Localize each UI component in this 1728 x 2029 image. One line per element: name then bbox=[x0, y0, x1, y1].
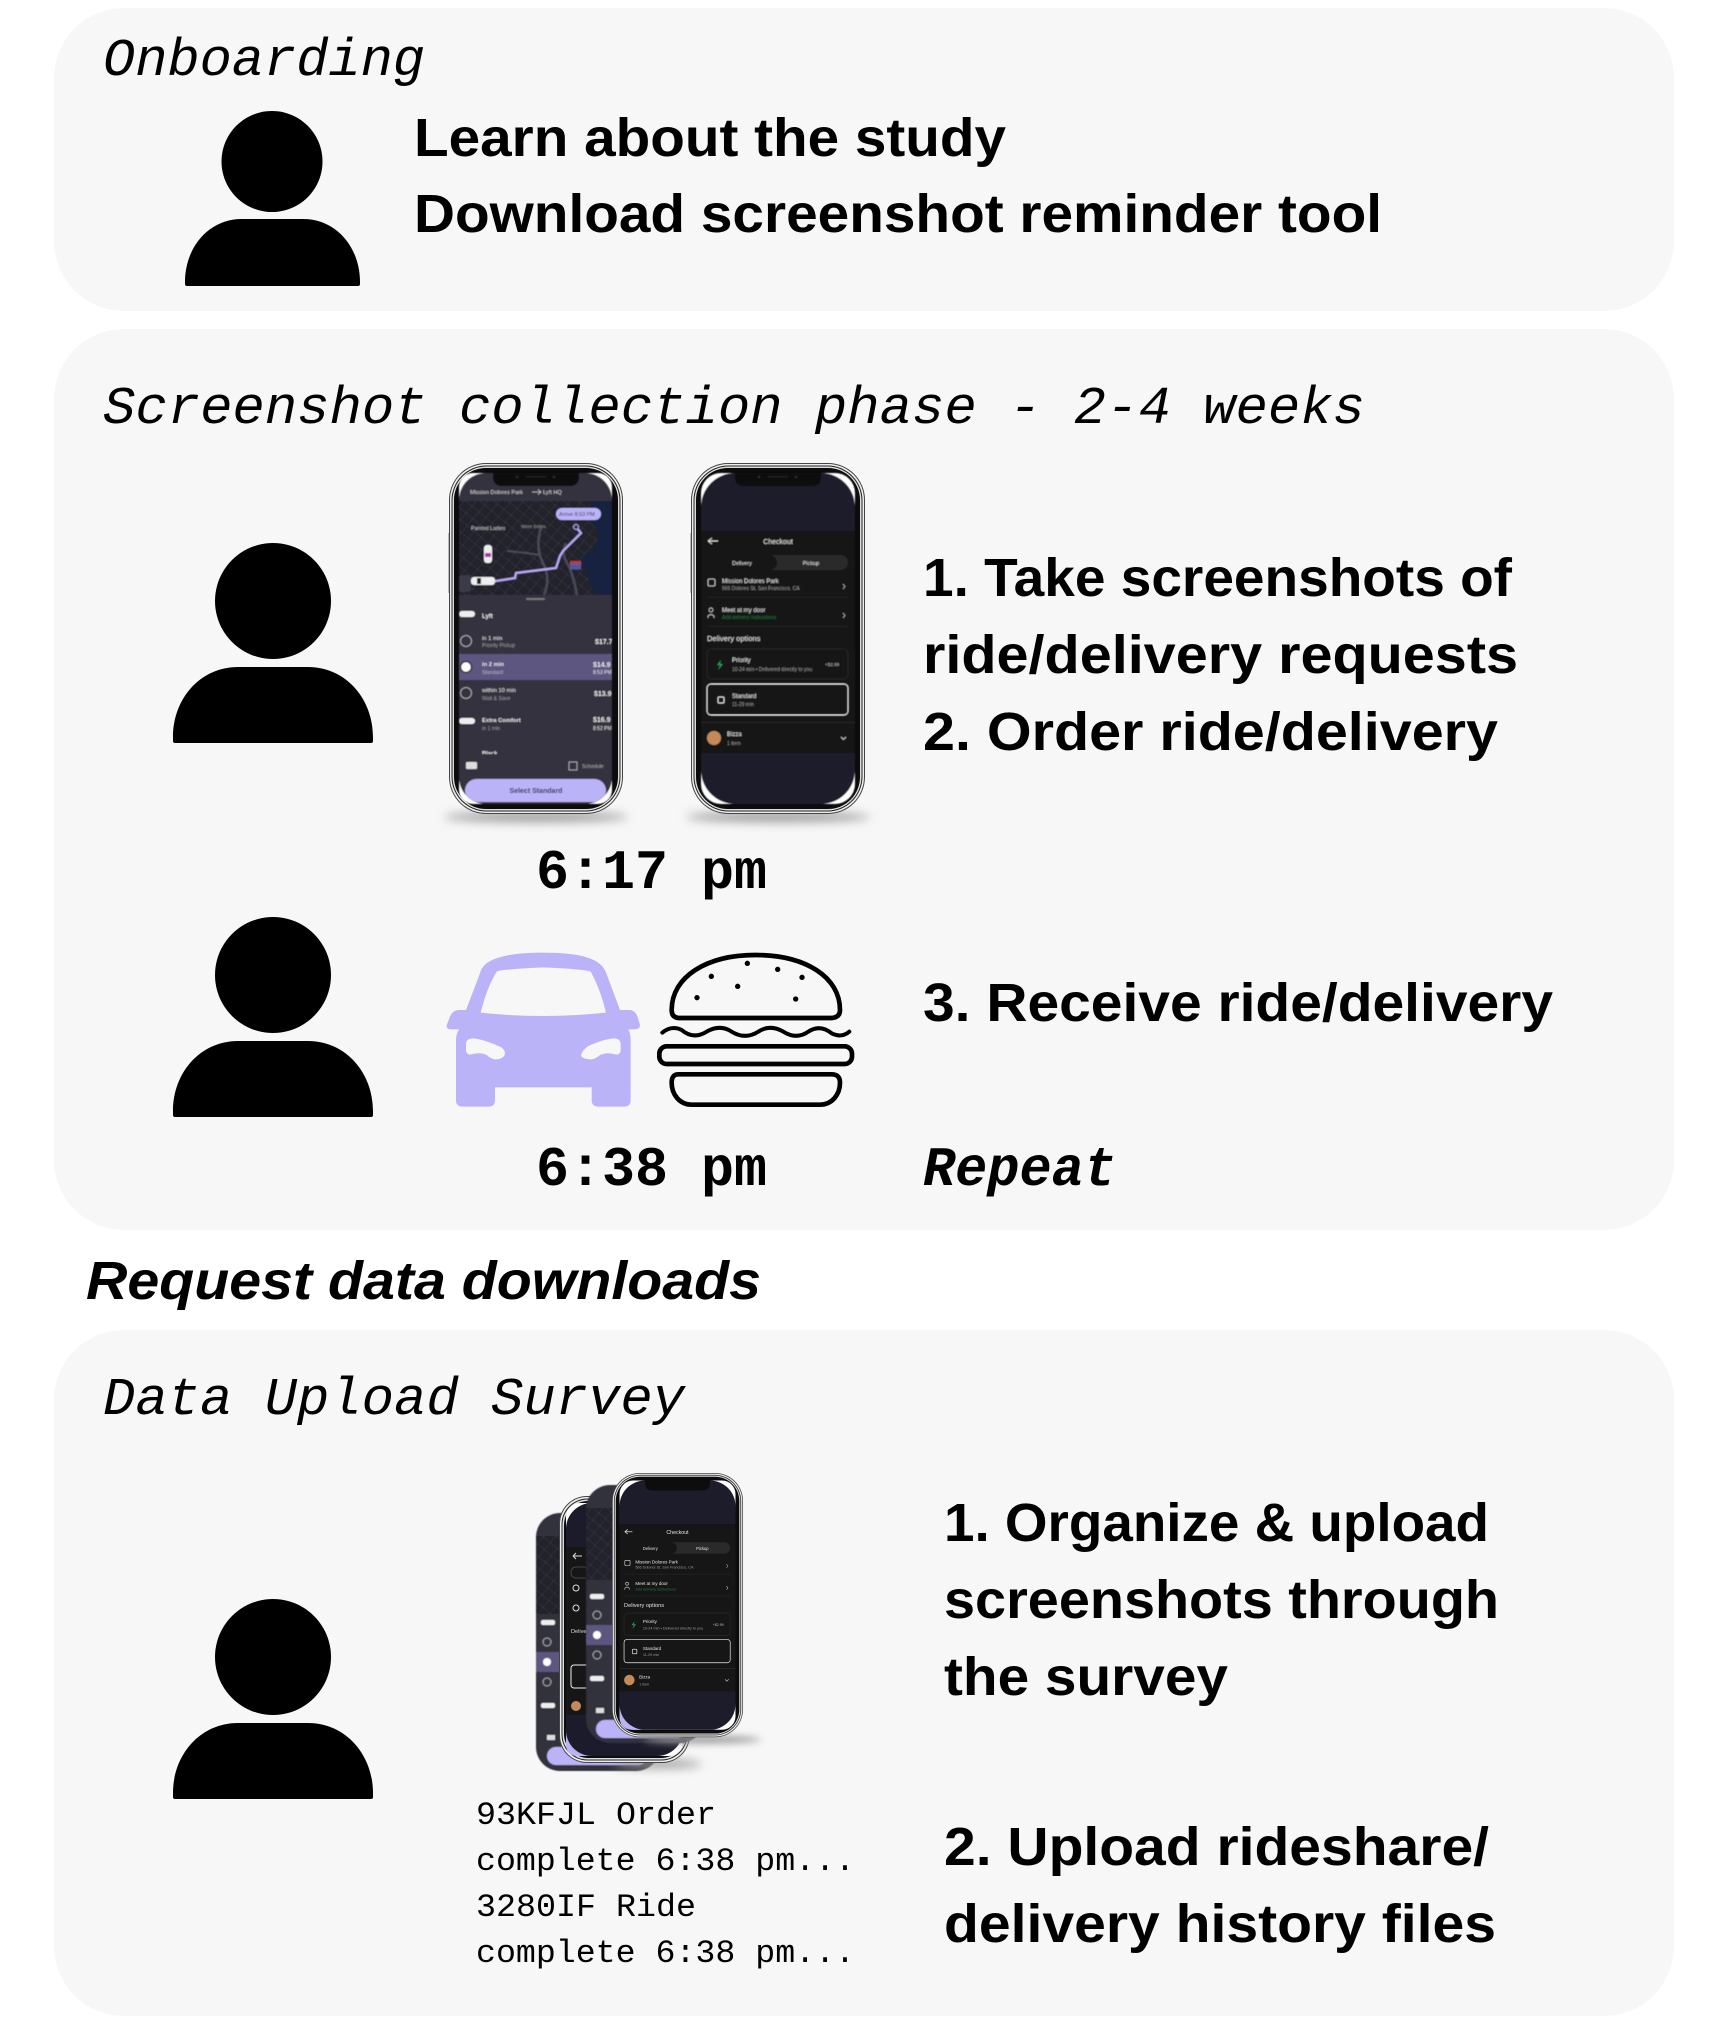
phone: Lyft ride request screenshot bbox=[444, 463, 628, 822]
phone: delivery checkout screenshot: 11-29 min bbox=[732, 702, 754, 708]
text: upload step 2 bbox=[944, 1817, 1496, 1954]
phone: delivery checkout screenshot: Checkout bbox=[763, 539, 793, 546]
phone: delivery checkout screenshot: Mission Dolores Park bbox=[722, 579, 780, 585]
phone: Lyft ride request screenshot: Lyft bbox=[482, 614, 493, 620]
text: upload step 1: the survey bbox=[944, 1647, 1228, 1707]
text: request steps bbox=[923, 548, 1518, 762]
phone: delivery checkout screenshot: Delivery options bbox=[707, 634, 761, 643]
phone: delivery checkout screenshot: Standard bbox=[732, 694, 756, 700]
phone: delivery checkout screenshot: Meet at my door bbox=[722, 608, 765, 614]
front checkout phone: Checkout bbox=[666, 1530, 689, 1536]
text: upload step 2: delivery history files bbox=[944, 1894, 1496, 1954]
front checkout phone bbox=[612, 1473, 761, 1743]
icon: person bbox=[173, 917, 373, 1117]
phone: delivery checkout screenshot: Add delivery instructions bbox=[722, 615, 777, 621]
heading: data upload survey: Data Upload Survey bbox=[103, 1370, 686, 1430]
image: stack of phone screenshots bbox=[536, 1473, 761, 1771]
phone: delivery checkout screenshot: Pickup bbox=[803, 561, 819, 567]
phone: Lyft ride request screenshot: $16.9 bbox=[593, 717, 611, 724]
front checkout phone: Bizza bbox=[639, 1675, 651, 1680]
timestamp: receipt time: 6:38 pm bbox=[536, 1138, 767, 1202]
text: file listing: 3280IF Ride bbox=[476, 1889, 696, 1926]
phone: delivery checkout screenshot: Delivery bbox=[732, 561, 752, 567]
phone: Lyft ride request screenshot: in 2 min bbox=[482, 662, 504, 668]
text: onboarding steps: Learn about the study bbox=[414, 108, 1006, 168]
middle Lyft screenshot bbox=[586, 1485, 704, 1743]
text: onboarding steps: Download screenshot reminder tool bbox=[414, 184, 1382, 244]
front checkout phone: Priority bbox=[643, 1619, 658, 1624]
front checkout phone: Add delivery instructions bbox=[635, 1587, 676, 1591]
phone: Lyft ride request screenshot: Arrive 8:53 PM bbox=[559, 512, 595, 518]
phone: Lyft ride request screenshot: $13.9 bbox=[594, 691, 612, 698]
phone: Lyft ride request screenshot: Standard bbox=[482, 670, 503, 676]
text: onboarding steps bbox=[414, 108, 1382, 244]
phone: Lyft ride request screenshot: in 1 min bbox=[482, 636, 502, 642]
panel: data upload survey bbox=[54, 1330, 1674, 2016]
second checkout phone bbox=[559, 1496, 702, 1768]
phone: delivery checkout screenshot: 10-24 min • Delivered directly to you bbox=[732, 667, 812, 673]
front checkout phone: Delivery bbox=[643, 1546, 659, 1551]
icon: car bbox=[447, 953, 640, 1107]
front checkout phone: Meet at my door bbox=[635, 1581, 668, 1586]
text: receive step: 3. Receive ride/delivery bbox=[923, 973, 1553, 1033]
timestamp: order time: 6:17 pm bbox=[536, 841, 767, 905]
phone: Lyft ride request screenshot: $17.7 bbox=[595, 639, 613, 646]
phone: Lyft ride request screenshot: in 1 min bbox=[482, 726, 500, 732]
text: file listing: 93KFJL Order bbox=[476, 1797, 716, 1834]
text: file listing: complete 6:38 pm... bbox=[476, 1843, 855, 1880]
second checkout phone: Delivery options bbox=[571, 1629, 611, 1635]
heading: onboarding: Onboarding bbox=[103, 31, 425, 91]
phone: delivery checkout screenshot: Priority bbox=[732, 658, 751, 664]
text: file listing: complete 6:38 pm... bbox=[476, 1935, 855, 1972]
icon: person bbox=[185, 111, 360, 286]
text: upload step 1: screenshots through bbox=[944, 1570, 1499, 1630]
icon: person bbox=[173, 543, 373, 743]
phone: Lyft ride request screenshot: 8:52 PM bbox=[593, 726, 612, 732]
panel: onboarding bbox=[54, 8, 1674, 311]
heading: screenshot collection phase: Screenshot collection phase - 2-4 weeks bbox=[103, 379, 1365, 439]
front checkout phone: 11-29 min bbox=[643, 1653, 659, 1657]
phone: Lyft ride request screenshot: Wait & Save bbox=[482, 696, 510, 702]
phone: Lyft ride request screenshot: Lyft HQ bbox=[543, 490, 562, 496]
front checkout phone: +$2.99 bbox=[713, 1623, 724, 1627]
front checkout phone: Pickup bbox=[696, 1546, 709, 1551]
text: request steps: 1. Take screenshots of bbox=[923, 548, 1513, 608]
phone: delivery checkout screenshot: +$2.99 bbox=[825, 662, 840, 667]
phone: Lyft ride request screenshot: Mission Dolores Park bbox=[470, 490, 523, 496]
phone: Lyft ride request screenshot: Select Standard bbox=[510, 788, 562, 795]
phone: Lyft ride request screenshot: Schedule bbox=[582, 764, 604, 770]
phone: Lyft ride request screenshot: Priority Pickup bbox=[482, 643, 515, 649]
phone: delivery checkout screenshot: 1 item bbox=[727, 741, 741, 747]
icon: burger bbox=[659, 955, 852, 1105]
text: repeat: Repeat bbox=[923, 1138, 1116, 1202]
phone: Lyft ride request screenshot: $14.9 bbox=[593, 662, 611, 669]
text: request steps: ride/delivery requests bbox=[923, 625, 1518, 685]
phone: delivery checkout screenshot: 566 Dolores St, San Francisco, CA bbox=[722, 586, 800, 592]
phone: Lyft ride request screenshot: Black bbox=[482, 751, 498, 757]
phone: Lyft ride request screenshot: West SoMa bbox=[521, 524, 546, 530]
phone: delivery checkout screenshot: Bizza bbox=[727, 732, 742, 738]
front checkout phone: Mission Dolores Park bbox=[635, 1559, 679, 1564]
front checkout phone: 10-24 min • Delivered directly to you bbox=[643, 1627, 703, 1631]
text: upload step 1: 1. Organize & upload bbox=[944, 1493, 1489, 1553]
text: file listing bbox=[476, 1797, 855, 1972]
panel: screenshot collection phase bbox=[104, 384, 1553, 1196]
phone: delivery checkout screenshot bbox=[686, 463, 870, 822]
text: upload step 2: 2. Upload rideshare/ bbox=[944, 1817, 1489, 1877]
phone: Lyft ride request screenshot: within 10 min bbox=[481, 688, 516, 694]
phone: Lyft ride request screenshot: 8:53 PM bbox=[593, 670, 612, 676]
icon: person bbox=[173, 1599, 373, 1799]
text: request steps: 2. Order ride/delivery bbox=[923, 702, 1498, 762]
front checkout phone: Standard bbox=[643, 1646, 662, 1651]
front checkout phone: Delivery options bbox=[624, 1603, 664, 1609]
back Lyft screenshot bbox=[536, 1513, 660, 1771]
heading: request data downloads: Request data downloads bbox=[86, 1251, 761, 1311]
front checkout phone: 1 item bbox=[639, 1682, 649, 1686]
text: upload step 1 bbox=[944, 1493, 1499, 1707]
phone: Lyft ride request screenshot: Extra Comfort bbox=[482, 718, 521, 724]
phone: Lyft ride request screenshot: Painted Ladies bbox=[471, 526, 506, 532]
front checkout phone: 566 Dolores St, San Francisco, CA bbox=[635, 1566, 694, 1570]
